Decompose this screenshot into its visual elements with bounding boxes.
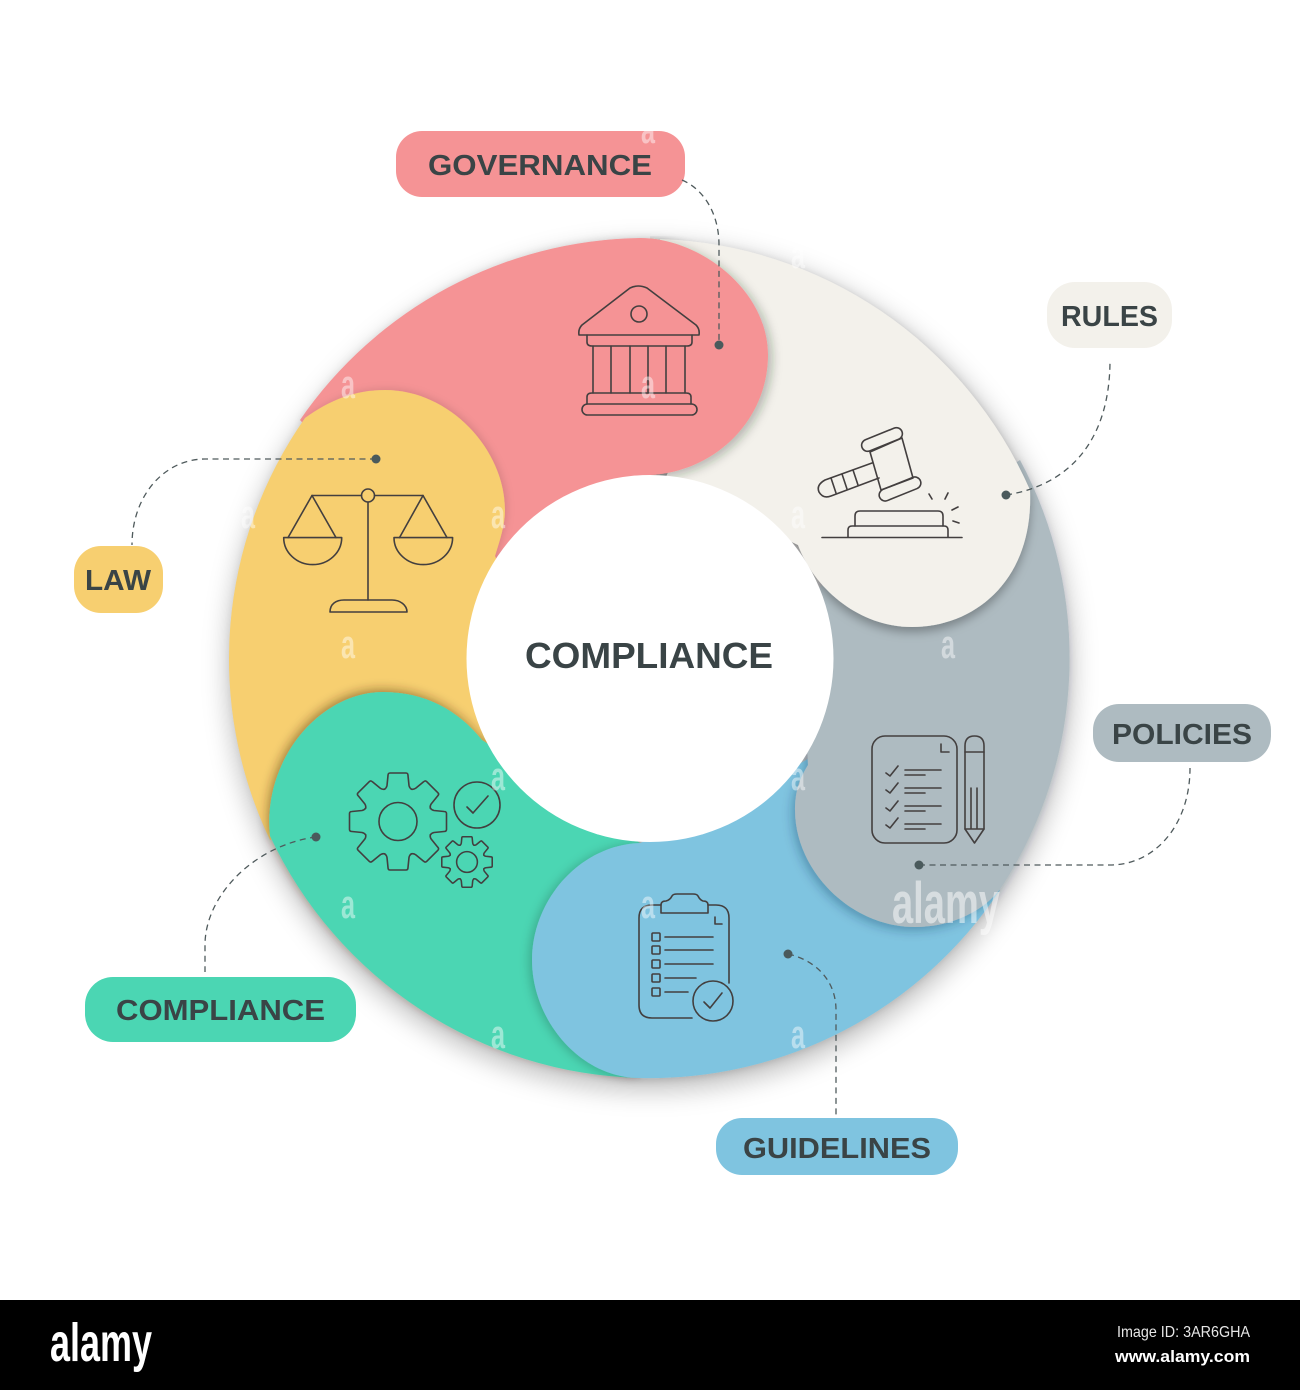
pill: compliance (85, 977, 356, 1042)
watermark letters: a (491, 493, 505, 537)
footer bar: Image ID: 3AR6GHA (1117, 1324, 1250, 1341)
watermark letters: a (341, 883, 355, 927)
watermark letters: a (791, 755, 805, 799)
segment: guidelines (532, 755, 1000, 1078)
watermark letters (241, 108, 955, 1057)
watermark letters: a (491, 1013, 505, 1057)
connector: policies (914, 768, 1190, 870)
segment: policies (795, 460, 1070, 927)
pill: governance: GOVERNANCE (428, 150, 652, 182)
pill: policies (1093, 704, 1271, 762)
footer bar: alamy (50, 1313, 152, 1373)
icon: clipboard with check (639, 894, 733, 1021)
watermark letters: a (341, 623, 355, 667)
pill: guidelines: GUIDELINES (743, 1133, 931, 1165)
pill: policies: POLICIES (1112, 719, 1252, 751)
watermark letters: a (791, 233, 805, 277)
watermark letters: a (641, 108, 655, 152)
watermark letters: a (941, 623, 955, 667)
pill: rules (1047, 282, 1172, 348)
connector: guidelines (784, 950, 836, 1115)
pill: governance (396, 131, 685, 197)
watermark letters: a (791, 493, 805, 537)
watermark letters: a (641, 363, 655, 407)
segment: governance head overlap (650, 236, 778, 478)
watermark letters: a (491, 755, 505, 799)
centre title: COMPLIANCE (525, 635, 773, 676)
connector: governance (682, 180, 724, 350)
footer bar (0, 1300, 1300, 1390)
segment: governance (300, 238, 768, 640)
connector: law (132, 454, 380, 545)
watermark letters: a (641, 883, 655, 927)
pill: rules: RULES (1061, 301, 1158, 333)
connector: compliance (205, 832, 320, 972)
segment: compliance (269, 692, 660, 1078)
watermark letters: a (241, 493, 255, 537)
watermark letters: a (791, 1013, 805, 1057)
connector: rules (1002, 360, 1110, 500)
centre circle (466, 475, 834, 842)
pill: law: LAW (85, 565, 152, 597)
segment: rules (660, 239, 1030, 627)
icon: gears and check (350, 773, 500, 887)
icon: scales (284, 489, 453, 612)
footer bar: www.alamy.com (1114, 1347, 1250, 1366)
icon: gavel (818, 426, 962, 538)
watermark wordmark: alamy (892, 871, 1000, 936)
ring outer shadow (226, 244, 1074, 1092)
icon: government building (579, 286, 699, 415)
pill: compliance: COMPLIANCE (116, 995, 325, 1027)
pill: guidelines (716, 1118, 958, 1175)
pill: law (74, 546, 163, 613)
icon: checklist and pencil (872, 736, 984, 843)
watermark letters: a (341, 363, 355, 407)
segment: law (229, 390, 560, 840)
